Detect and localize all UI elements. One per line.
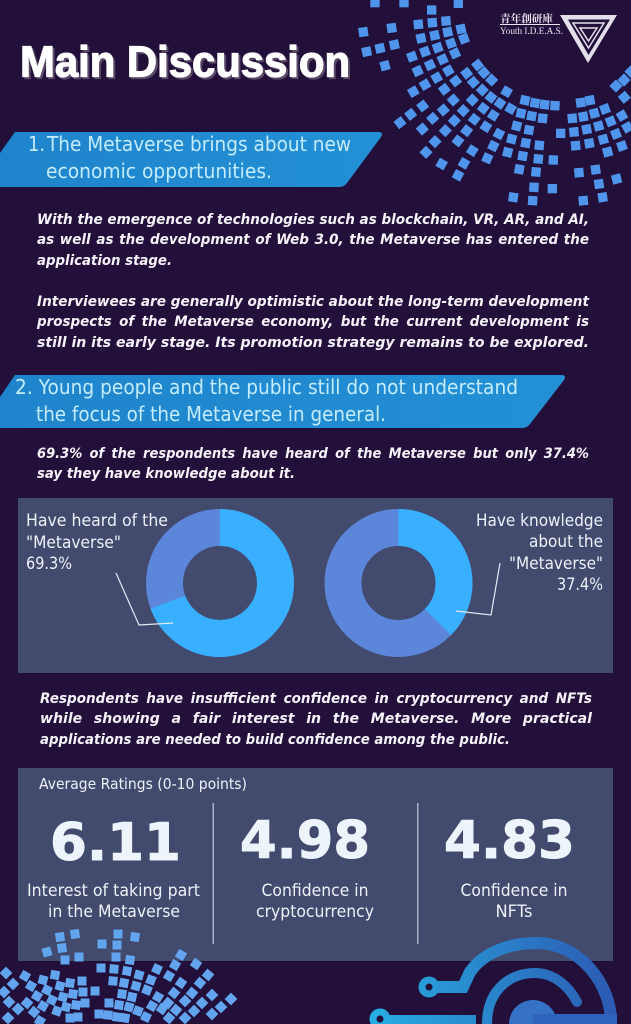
logo: Youth I.D.E.A.S.: 青年創研庫 [500, 12, 554, 25]
stat: cryptocurrency confidence 4.98: Confidence in [262, 881, 368, 900]
text block: confidence and interest: applications are needed to build confidence among the public. [40, 732, 510, 748]
banner: section 1 heading: The Metaverse brings about new [46, 132, 351, 156]
stat: cryptocurrency confidence 4.98: cryptocurrency [256, 902, 374, 921]
text block: Metaverse application stage: as well as the development of Web 3.0, the Metaverse has entered the [37, 232, 589, 248]
text block: confidence and interest: while showing a fair interest in the Metaverse. More practical [40, 711, 593, 727]
text block: awareness statistics [37, 446, 589, 482]
stat: interest 6.11: Interest of taking part [27, 881, 200, 900]
text block: Metaverse application stage: With the emergence of technologies such as blockchain, VR, AR, and AI, [37, 212, 589, 228]
label: heard of the Metaverse: Have heard of the [26, 511, 168, 530]
label: heard of the Metaverse: "Metaverse" [26, 533, 121, 552]
logo: Youth I.D.E.A.S. [500, 12, 617, 63]
logo: Youth I.D.E.A.S.: Youth I.D.E.A.S. [500, 26, 563, 36]
text block: optimism about Metaverse economy [36, 294, 590, 351]
chart: heard of the Metaverse 69.3% [164, 528, 276, 638]
text block: confidence and interest [40, 691, 593, 748]
stat: NFT confidence 4.83 [444, 811, 575, 921]
stat: interest 6.11: 6.11 [50, 813, 181, 873]
icon: circuit emblem [373, 943, 617, 1024]
title: Main Discussion [20, 38, 350, 86]
label: knowledge about the Metaverse: about the [529, 532, 603, 551]
panel: average ratings [18, 768, 613, 961]
panel heading: Average Ratings (0-10 points) [39, 775, 247, 793]
label: knowledge about the Metaverse [476, 511, 603, 594]
stat: interest 6.11 [27, 813, 200, 921]
leader line: right donut [456, 563, 500, 615]
title: Main Discussion [22, 40, 352, 88]
stat: NFT confidence 4.83: NFTs [496, 902, 532, 921]
stat: NFT confidence 4.83: Confidence in [460, 881, 568, 900]
text block: optimism about Metaverse economy: Interviewees are generally optimistic about the long-term development [37, 294, 590, 310]
stat: cryptocurrency confidence 4.98: 4.98 [240, 811, 370, 871]
label: knowledge about the Metaverse: 37.4% [557, 575, 603, 594]
stat: interest 6.11: in the Metaverse [48, 902, 180, 921]
banner: section 2 heading: 2. Young people and the public still do not understand [15, 375, 518, 399]
stat: cryptocurrency confidence 4.98 [240, 811, 374, 921]
banner: section 1 heading: 1. [28, 132, 45, 156]
banner: section 2 heading [0, 375, 565, 428]
text block: confidence and interest: Respondents have insufficient confidence in cryptocurrency and NFTs [40, 691, 592, 707]
text block: optimism about Metaverse economy: prospects of the Metaverse economy, but the current development is [36, 314, 589, 330]
banner: section 1 heading [0, 132, 382, 187]
banner: section 2 heading: the focus of the Metaverse in general. [36, 402, 386, 426]
text block: Metaverse application stage [37, 212, 589, 269]
stat: NFT confidence 4.83: 4.83 [444, 811, 575, 871]
text block: awareness statistics: say they have knowledge about it. [37, 466, 295, 482]
decoration: top-right square fan pattern [358, 0, 631, 206]
banner: section 1 heading: economic opportunities. [46, 159, 272, 183]
panel: donut charts [18, 498, 613, 673]
label: heard of the Metaverse [26, 511, 168, 573]
chart: knowledge about the Metaverse 37.4% [343, 528, 454, 638]
text block: Metaverse application stage: application stage. [37, 253, 172, 269]
leader line: left donut [116, 573, 173, 625]
text block: optimism about Metaverse economy: still in its early stage. Its promotion strategy remains to be explored. [37, 335, 589, 351]
label: knowledge about the Metaverse: "Metaverse" [509, 554, 603, 573]
label: heard of the Metaverse: 69.3% [26, 554, 72, 573]
label: knowledge about the Metaverse: Have knowledge [476, 511, 603, 530]
decoration: bottom-left square fan pattern [0, 929, 237, 1024]
